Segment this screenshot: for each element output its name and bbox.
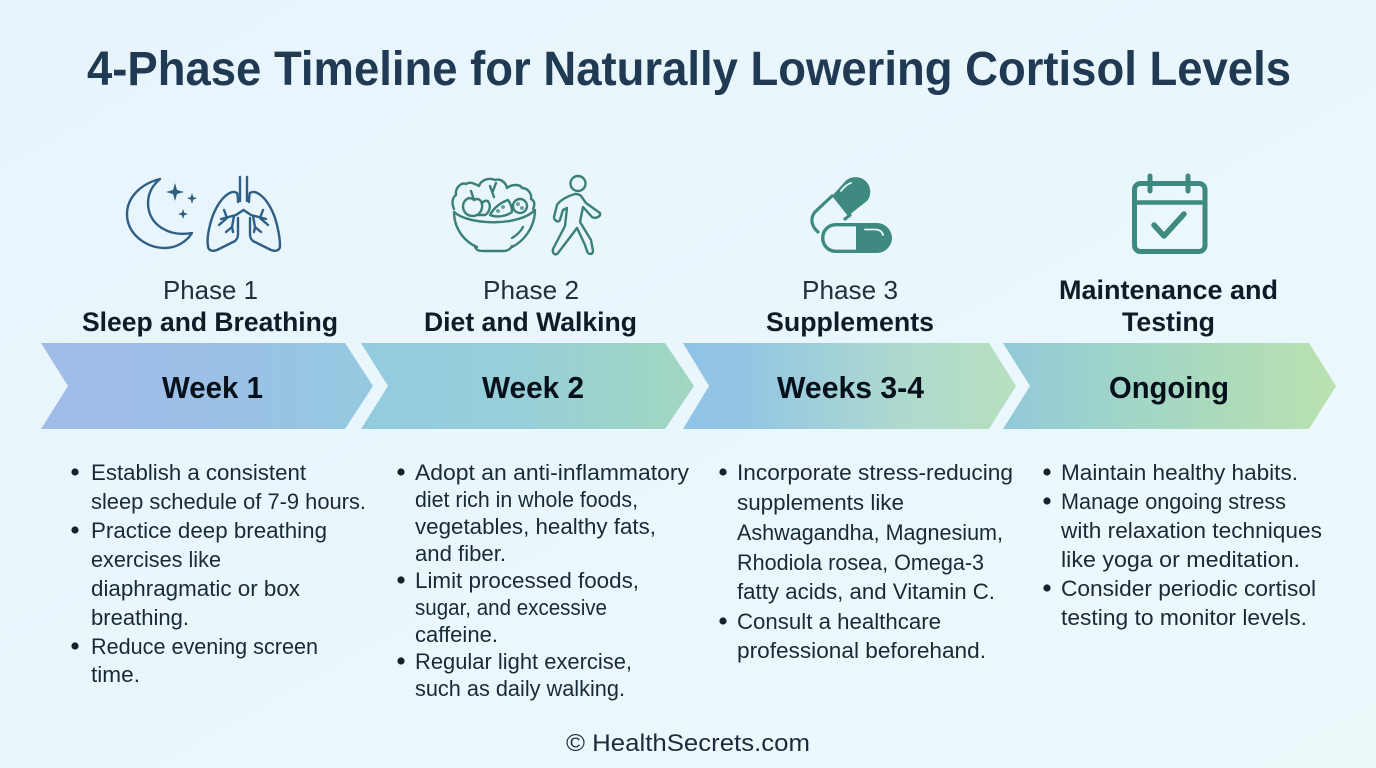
icon: moon and stars	[127, 179, 197, 248]
icon: lungs	[208, 177, 280, 251]
panel: maintenance and testing	[1003, 176, 1336, 630]
icon: supplement capsules	[812, 177, 892, 253]
chevron: week 2: Week 2	[482, 370, 584, 405]
bullet list: phase 3: professional beforehand.	[737, 638, 986, 663]
bullet list: phase 2: sugar, and excessive	[415, 595, 607, 620]
chevron: weeks 3-4	[683, 343, 1016, 429]
bullet list: phase 3: Ashwagandha, Magnesium,	[737, 520, 1003, 545]
bullet list: phase 2: diet rich in whole foods,	[415, 487, 638, 512]
bullet list: maintenance	[1043, 460, 1322, 630]
phase 3 heading: Supplements	[766, 307, 934, 337]
bullet list: phase 1: time.	[91, 662, 140, 687]
phase 1 label: Phase 1	[163, 275, 258, 305]
bullet list: maintenance: Maintain healthy habits.	[1061, 460, 1298, 485]
icon: calendar with check	[1134, 176, 1205, 252]
panel: phase 1	[41, 177, 373, 687]
maintenance heading	[1059, 275, 1278, 337]
chevron: week 2	[361, 343, 694, 429]
icon: walking person	[553, 176, 600, 254]
bullet list: maintenance: like yoga or meditation.	[1061, 547, 1300, 572]
chevron: week 1: Week 1	[162, 370, 263, 405]
bullet list: phase 2: caffeine.	[415, 622, 498, 647]
bullet list: phase 3: fatty acids, and Vitamin C.	[737, 579, 995, 604]
bullet list: maintenance: Manage ongoing stress	[1061, 489, 1286, 514]
bullet list: phase 1: sleep schedule of 7-9 hours.	[91, 489, 366, 514]
maintenance heading: Maintenance and	[1059, 275, 1278, 305]
title: 4-Phase Timeline for Naturally Lowering Cortisol Levels	[87, 43, 1291, 96]
bullet list: phase 3: supplements like	[737, 490, 904, 515]
bullet list: phase 1: Establish a consistent	[91, 460, 306, 485]
footer copyright: © HealthSecrets.com	[566, 730, 810, 757]
phase 3 label: Phase 3	[802, 275, 898, 305]
bullet list: phase 2: and fiber.	[415, 541, 506, 566]
panel: phase 3	[683, 177, 1016, 663]
bullet list: phase 3	[719, 460, 1013, 663]
bullet list: phase 1: Practice deep breathing	[91, 518, 327, 543]
bullet list: phase 1: Reduce evening screen	[91, 634, 318, 659]
chevron: week 1	[41, 343, 373, 429]
bullet list: maintenance: testing to monitor levels.	[1061, 605, 1307, 630]
bullet list: phase 2: vegetables, healthy fats,	[415, 514, 656, 539]
bullet list: phase 3: Incorporate stress-reducing	[737, 460, 1013, 485]
bullet list: phase 2: Adopt an anti-inflammatory	[415, 460, 689, 485]
chevron: ongoing	[1003, 343, 1336, 429]
bullet list: phase 1: diaphragmatic or box	[91, 576, 300, 601]
bullet list: phase 2	[397, 460, 689, 701]
bullet list: phase 3: Consult a healthcare	[737, 609, 941, 634]
bullet list: phase 2: Regular light exercise,	[415, 649, 632, 674]
bullet list: phase 3: Rhodiola rosea, Omega-3	[737, 550, 984, 575]
maintenance heading: Testing	[1122, 307, 1215, 337]
phase 2 heading: Diet and Walking	[424, 307, 637, 337]
icon: salad bowl	[453, 179, 535, 251]
panel: phase 2	[361, 176, 694, 701]
bullet list: phase 2: Limit processed foods,	[415, 568, 639, 593]
bullet list: phase 2: such as daily walking.	[415, 676, 625, 701]
chevron: weeks 3-4: Weeks 3-4	[777, 370, 925, 405]
bullet list: phase 1	[71, 460, 366, 687]
bullet list: phase 1: breathing.	[91, 605, 189, 630]
chevron: ongoing: Ongoing	[1109, 370, 1229, 405]
phase 2 label: Phase 2	[483, 275, 579, 305]
phase 1 heading: Sleep and Breathing	[82, 307, 338, 337]
bullet list: maintenance: with relaxation techniques	[1060, 518, 1322, 543]
bullet list: maintenance: Consider periodic cortisol	[1061, 576, 1316, 601]
bullet list: phase 1: exercises like	[91, 547, 221, 572]
